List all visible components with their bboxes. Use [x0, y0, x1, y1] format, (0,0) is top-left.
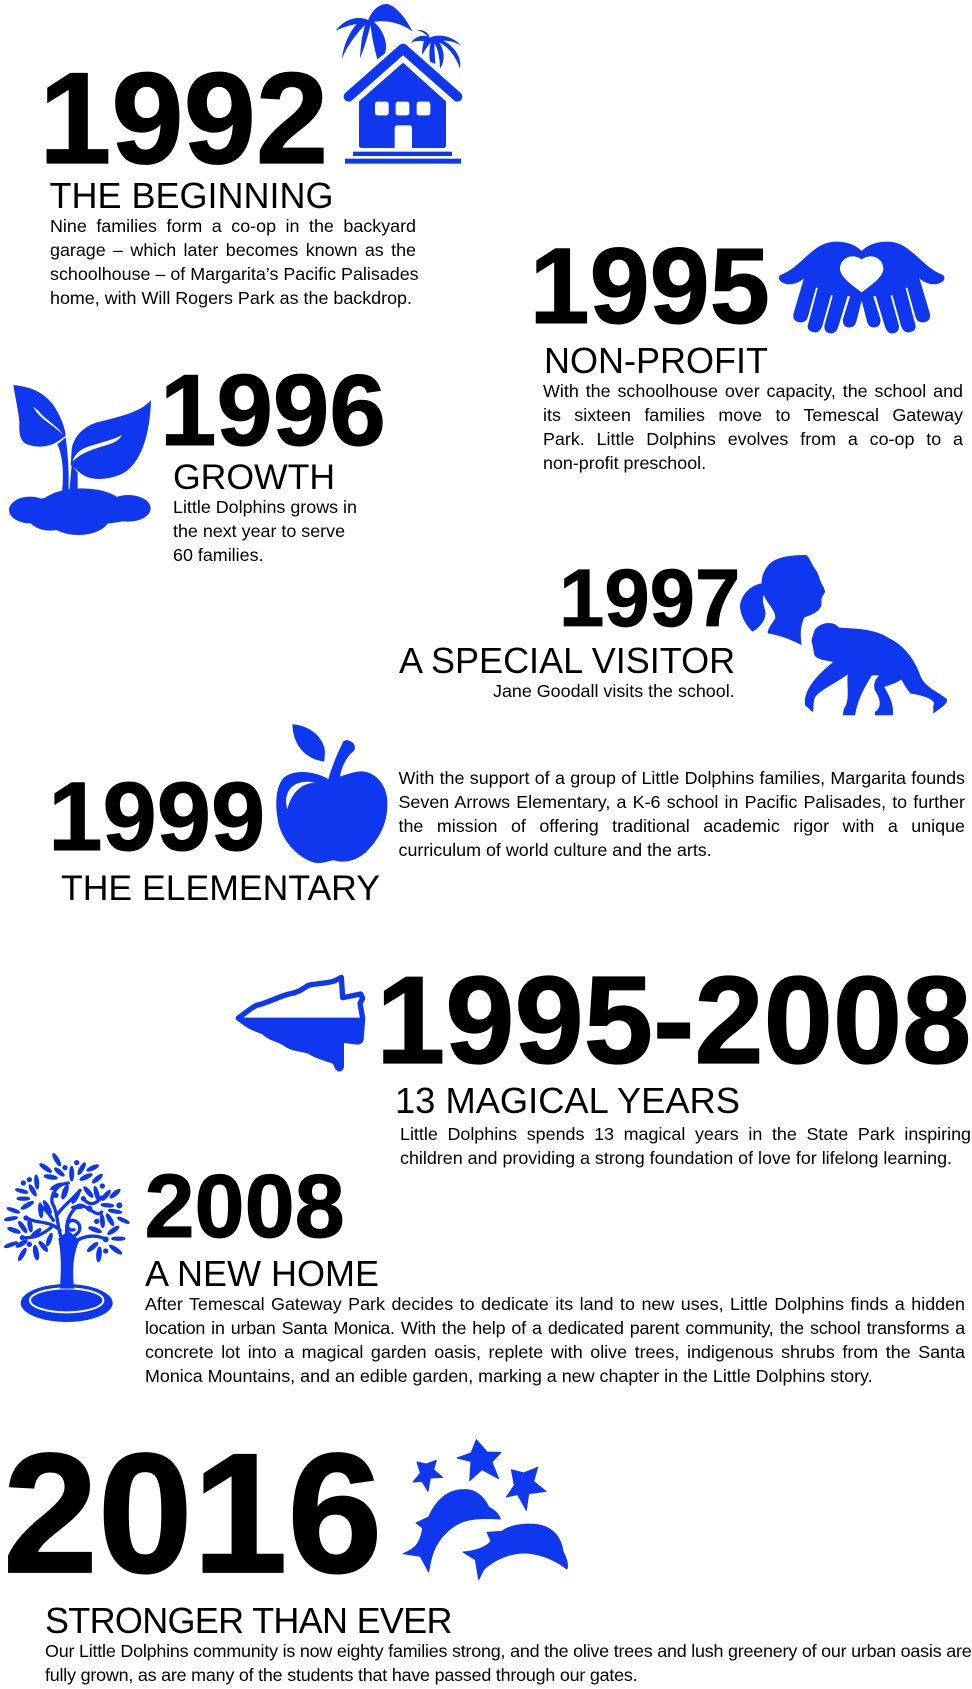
text block: 1995 description: non-profit preschool.: [543, 453, 706, 473]
year: 1999: 1999: [48, 762, 265, 871]
text block: 1996 description: 60 families.: [173, 545, 263, 565]
text block: 1999 description: With the support of a group of Little Dolphins families, Margarita founds: [398, 768, 965, 788]
year: 2016: 2016: [3, 1419, 382, 1609]
text block: 1999 description: the mission of offering traditional academic rigor with a unique: [398, 816, 965, 836]
text block: 2008 description: Monica Mountains, and an edible garden, marking a new chapter in the Little Dolphins story.: [145, 1366, 873, 1386]
panel: 1995 non-profit: [530, 225, 963, 473]
panel: 1997 a special visitor: [399, 553, 947, 716]
text block: 1992 description: garage – which later becomes known as the: [50, 240, 416, 260]
year: 1995: 1995: [530, 225, 770, 346]
heading: non-profit: NON-PROFIT: [544, 340, 768, 381]
text block: 1995 description: Park. Little Dolphins evolves from a co-op to a: [543, 429, 963, 449]
icon: chimpanzee silhouette: [804, 623, 947, 716]
icon: tree: [4, 1153, 130, 1322]
text block: 1995 description: With the schoolhouse over capacity, the school and: [543, 381, 963, 401]
icon: house with palm trees: [336, 4, 462, 164]
icon: apple: [276, 724, 388, 864]
heading: growth: GROWTH: [173, 457, 335, 497]
text block: 13 years description: Little Dolphins spends 13 magical years in the State Park inspiring: [400, 1124, 971, 1144]
text block: 2008 description: location in urban Santa Monica. With the help of a dedicated parent community, the school transforms a: [145, 1318, 965, 1338]
text block: 1992 description: Nine families form a co-op in the backyard: [50, 216, 416, 236]
text block: 1995 description: its sixteen families move to Temescal Gateway: [543, 405, 963, 425]
icon: woman silhouette: [740, 555, 826, 645]
year: 1995-2008: 1995-2008: [376, 951, 971, 1090]
text block: 13 years description: [400, 1124, 971, 1168]
panel: 2016 stronger than ever: [3, 1419, 971, 1685]
heading: stronger than ever: STRONGER THAN EVER: [45, 1600, 452, 1641]
text block: 1997 description: Jane Goodall visits the school.: [493, 681, 735, 701]
year: 1997: 1997: [559, 553, 740, 644]
text block: 1996 description: [173, 497, 357, 565]
text block: 1999 description: curriculum of world culture and the arts.: [398, 840, 712, 860]
text block: 2008 description: [145, 1294, 966, 1386]
heading: the elementary: THE ELEMENTARY: [61, 868, 380, 908]
panel: 1992 the beginning: [39, 4, 462, 308]
text block: 1992 description: home, with Will Rogers Park as the backdrop.: [50, 288, 412, 308]
heading: the beginning: THE BEGINNING: [50, 175, 334, 216]
text block: 1992 description: schoolhouse – of Margarita’s Pacific Palisades: [50, 264, 419, 284]
icon: seedling: [9, 385, 151, 535]
text block: 1996 description: Little Dolphins grows in: [173, 497, 357, 517]
panel: 1996 growth: [9, 353, 386, 565]
heading: 13 magical years: 13 MAGICAL YEARS: [395, 1080, 740, 1121]
text block: 1999 description: [398, 768, 965, 860]
heading: a new home: A NEW HOME: [145, 1253, 379, 1294]
text block: 2008 description: concrete lot into a magical garden oasis, replete with olive trees, indigenous shrubs from the Santa: [145, 1342, 965, 1362]
heading: a special visitor: A SPECIAL VISITOR: [399, 640, 735, 681]
text block: 2016 description: [45, 1641, 971, 1685]
text block: 13 years description: children and providing a strong foundation of love for lifelong learning.: [400, 1148, 952, 1168]
icon: arrowhead: [236, 974, 366, 1072]
text block: 1996 description: the next year to serve: [173, 521, 345, 541]
panel: 1995-2008 13 magical years: [236, 951, 971, 1168]
text block: 1992 description: [50, 216, 419, 308]
panel: 2008 a new home: [4, 1153, 966, 1386]
text block: 2008 description: After Temescal Gateway Park decides to dedicate its land to new uses, Little Dolphins finds a hidden: [145, 1294, 965, 1314]
text block: 2016 description: fully grown, as are many of the students that have passed through our gates.: [45, 1665, 637, 1685]
year: 2008: 2008: [144, 1157, 345, 1257]
text block: 1999 description: Seven Arrows Elementary, a K-6 school in Pacific Palisades, to further: [398, 792, 965, 812]
icon: hands holding heart: [778, 242, 944, 334]
year: 1992: 1992: [39, 45, 328, 191]
text block: 1995 description: [543, 381, 963, 473]
icon: dolphins and stars: [402, 1439, 568, 1580]
panel: 1999 the elementary: [48, 724, 965, 908]
year: 1996: 1996: [160, 353, 386, 467]
text block: 2016 description: Our Little Dolphins community is now eighty families strong, and the olive trees and lush greenery of our urban oasis are: [45, 1641, 971, 1661]
